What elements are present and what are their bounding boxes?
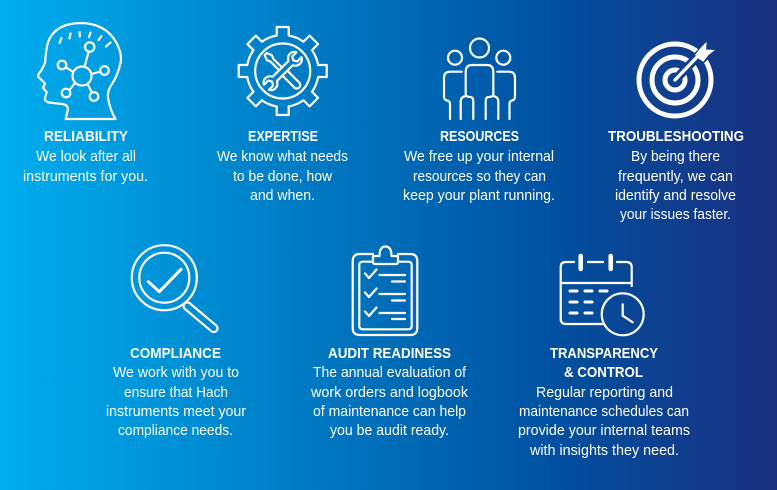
text: resources description [403,148,555,204]
text: resources description: keep your plant running. [403,187,555,204]
text: reliability description: instruments for you. [23,168,148,185]
panel: reliability [23,23,148,185]
heading: reliability: RELIABILITY [44,128,128,145]
text: compliance description: ensure that Hach [124,384,228,401]
text: troubleshooting description [615,148,736,223]
heading: transparency and control: TRANSPARENCY [550,345,658,362]
text: transparency description: maintenance schedules can [519,403,689,420]
text: compliance description: compliance needs. [118,422,233,439]
icon: target with arrow [639,42,715,116]
heading: troubleshooting: TROUBLESHOOTING [608,128,744,145]
text: troubleshooting description: frequently, we can [618,168,733,185]
icon: three people [444,38,515,119]
icon: magnifier with check [132,245,219,334]
text: resources description: resources so they can [413,168,546,185]
text: audit readiness description: you be audit ready. [330,422,449,439]
heading: resources: RESOURCES [440,128,519,145]
panel: transparency and control [518,256,690,459]
panel: troubleshooting [608,42,744,223]
text: compliance description: instruments meet your [106,403,246,420]
text: reliability description: We look after all [36,148,136,165]
text: audit readiness description [310,364,468,439]
text: expertise description: to be done, how [233,168,332,185]
text: troubleshooting description: identify and resolve [615,187,736,204]
panel: audit readiness [310,246,468,439]
icon: clipboard checklist [353,246,417,335]
text: troubleshooting description: your issues faster. [620,206,731,223]
text: audit readiness description: The annual evaluation of [313,364,467,381]
heading: audit readiness: AUDIT READINESS [328,345,451,362]
heading: compliance: COMPLIANCE [130,345,221,362]
text: audit readiness description: work orders and logbook [310,384,468,401]
heading: expertise: EXPERTISE [248,128,318,145]
text: compliance description: We work with you to [113,364,239,381]
text: troubleshooting description: By being there [631,148,720,165]
text: audit readiness description: of maintenance can help [313,403,466,420]
text: compliance description [106,364,246,439]
text: transparency description: Regular reporting and [536,384,673,401]
text: transparency description [518,384,690,459]
panel: compliance [106,245,246,439]
icon: head with network [38,23,121,119]
heading: transparency and control [550,345,658,381]
text: expertise description: We know what needs [217,148,348,165]
text: expertise description: and when. [250,187,315,204]
text: transparency description: with insights they need. [529,442,679,459]
heading: transparency and control: & CONTROL [564,364,643,381]
text: resources description: We free up your internal [404,148,554,165]
text: transparency description: provide your internal teams [518,422,690,439]
panel: expertise [217,25,348,204]
panel: resources [403,38,555,204]
icon: gear with tools [237,25,329,117]
icon: calendar with clock [561,256,644,335]
text: expertise description [217,148,348,204]
text: reliability description [23,148,148,185]
